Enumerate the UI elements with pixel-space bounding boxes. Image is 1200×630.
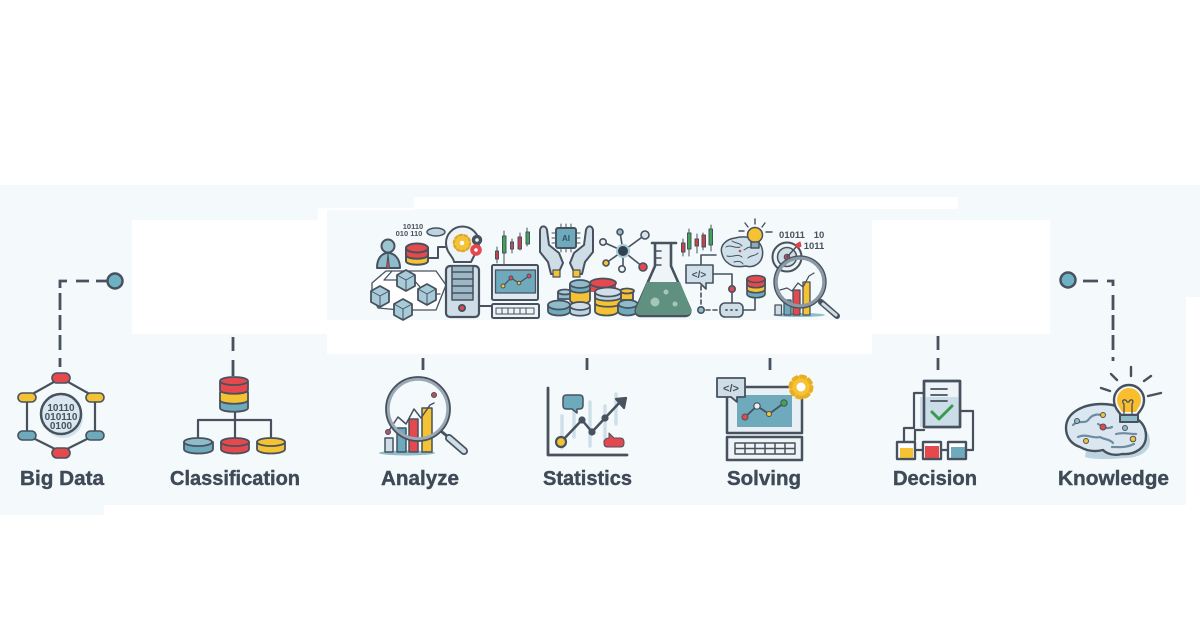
binary text and coin: 10110 — [403, 222, 423, 231]
icon: layered database — [747, 276, 765, 298]
icon: magnifier with bar chart — [773, 256, 837, 317]
connector: Big Data dashed line and node — [60, 274, 122, 367]
icon: candlestick chart left — [496, 228, 530, 264]
label: Big Data: Big Data — [20, 468, 105, 490]
binary text and coin: 010 110 — [396, 229, 422, 238]
icon: Knowledge — [1066, 367, 1161, 459]
connector: Solving — [769, 358, 771, 370]
binary text and coin — [396, 222, 445, 238]
connector: Decision — [937, 336, 939, 370]
label: Classification: Classification — [170, 468, 300, 490]
icon: target — [772, 242, 802, 272]
icon: code bubble with flow connections: </> — [692, 270, 706, 281]
label: Analyze: Analyze — [381, 468, 459, 490]
binary text right — [779, 230, 825, 252]
icon: stacked coins — [548, 278, 638, 316]
icon: brain with bulb — [721, 219, 772, 267]
binary text right: 10 — [814, 230, 824, 241]
icon: Big Data — [18, 373, 104, 458]
connector: Knowledge dashed line and node — [1060, 272, 1113, 361]
binary text right: 1011 — [804, 241, 825, 252]
icon: hands holding AI chip: AI — [562, 234, 570, 243]
icon: Statistics — [548, 388, 627, 455]
label: Knowledge: Knowledge — [1058, 468, 1169, 490]
icon: person — [377, 240, 400, 268]
icon: Decision — [897, 381, 973, 459]
icon: computer tower — [446, 266, 492, 317]
icon: Classification — [184, 377, 285, 454]
connector: Statistics — [586, 358, 588, 370]
icon: keyboard — [492, 304, 539, 318]
label: Decision: Decision — [893, 468, 977, 490]
icon: hands holding AI chip — [540, 224, 593, 277]
label: Statistics: Statistics — [543, 468, 632, 490]
icon: blockchain cubes — [371, 270, 446, 320]
icon: Solving — [717, 376, 812, 460]
icon: molecule network — [600, 229, 649, 272]
icon: Big Data: 0100 — [50, 421, 73, 432]
icon: Analyze — [379, 377, 464, 456]
connector: Classification — [232, 337, 234, 376]
label: Solving: Solving — [727, 468, 801, 490]
icon: code bubble with flow connections — [686, 255, 755, 317]
icon: monitor with line chart — [492, 265, 538, 300]
icon: Big Data: 010110 — [45, 412, 78, 423]
icon: light bulb with gears — [446, 226, 480, 262]
connector: Analyze — [422, 358, 424, 370]
binary text right: 01011 — [779, 230, 806, 241]
icon: red and yellow database — [406, 244, 448, 265]
labels — [20, 468, 1169, 490]
icon: candlestick chart right — [682, 225, 712, 256]
icon: Solving: </> — [723, 383, 739, 395]
icon: Big Data: 10110 — [47, 403, 75, 414]
icon: laboratory flask — [636, 243, 691, 316]
central illustration — [371, 219, 837, 320]
